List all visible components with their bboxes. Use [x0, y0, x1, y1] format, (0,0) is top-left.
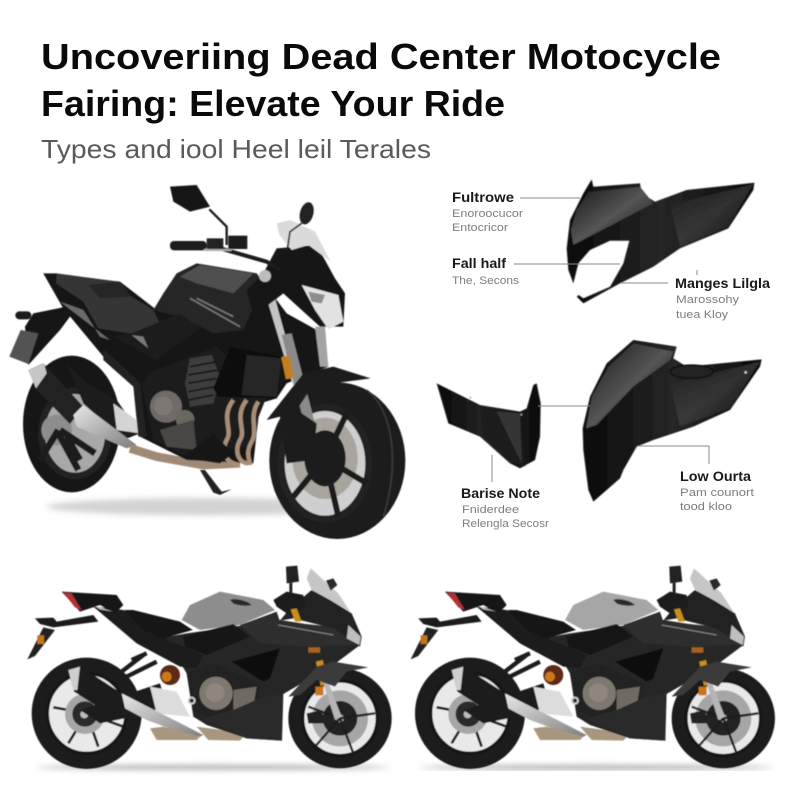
label: Barise Note [461, 485, 549, 530]
title [41, 36, 721, 124]
front fork and fender [262, 280, 371, 463]
label: Manges Lilgla [675, 275, 770, 321]
headlight fairing [247, 245, 345, 329]
label: Fultrowe: Enoroocucor [452, 208, 523, 220]
rear wheel [23, 356, 120, 492]
label: Low Ourta: tood kloo [680, 501, 732, 513]
label: Fultrowe [452, 189, 523, 234]
label: Barise Note: Barise Note [461, 485, 540, 501]
frame and radiator [213, 347, 283, 398]
windscreen [277, 220, 331, 262]
label: Barise Note: Relengla Secosr [462, 518, 549, 530]
label: Manges Lilgla: Manges Lilgla [675, 275, 770, 291]
title: Uncoveriing Dead Center Motocycle [41, 36, 721, 77]
fairing: lower right [583, 340, 762, 502]
label: Fall half: The, Secons [452, 275, 520, 287]
label: Fultrowe: Fultrowe [452, 189, 514, 205]
label: Manges Lilgla: Marossohy [676, 294, 740, 306]
handlebar [170, 236, 280, 270]
label: Low Ourta: Low Ourta [680, 468, 751, 484]
subtitle: Types and iool Heel leil Terales [41, 134, 431, 164]
label: Low Ourta [680, 468, 754, 513]
label: Manges Lilgla: tuea Kloy [676, 309, 729, 321]
front wheel [269, 382, 405, 539]
fairing parts [437, 179, 762, 502]
fairing: small left [437, 383, 541, 468]
label: Fall half: Fall half [452, 255, 506, 271]
body base [43, 273, 328, 463]
mirrors [170, 185, 316, 250]
sport motorcycle: left [27, 566, 392, 769]
leader lines [492, 198, 709, 482]
title: Fairing: Elevate Your Ride [41, 83, 505, 124]
label: Fultrowe: Entocricor [452, 222, 508, 234]
tank and side panel [113, 263, 263, 360]
copper exhaust headers [224, 400, 258, 465]
seat [56, 273, 162, 333]
main naked motorcycle [9, 185, 405, 539]
label: Fall half [452, 255, 520, 287]
engine [140, 347, 267, 457]
sport motorcycle: right [411, 566, 775, 769]
label: Low Ourta: Pam counort [680, 487, 754, 499]
label: Barise Note: Fniderdee [462, 504, 519, 516]
fairing: top upper [567, 179, 754, 303]
tail section [43, 273, 157, 383]
